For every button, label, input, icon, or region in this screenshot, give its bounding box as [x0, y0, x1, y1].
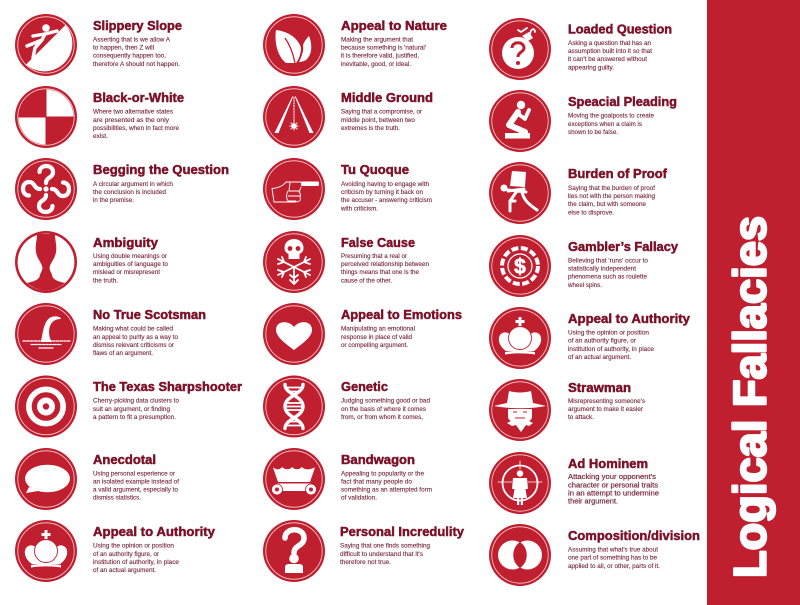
description: difficult to understand that it's	[340, 551, 424, 558]
item: Slippery Slope	[15, 14, 182, 76]
heading: Appeal to Nature	[341, 18, 447, 33]
description: mislead or misrepresent	[93, 269, 160, 276]
description: Saying that one finds something	[340, 543, 430, 550]
description: Manipulating an emotional	[341, 326, 416, 333]
item: Appeal to Authority (left column)	[15, 520, 216, 582]
heading: Appeal to Emotions	[341, 307, 462, 322]
description: it can't be answered without	[568, 56, 647, 63]
description: with criticism.	[340, 205, 378, 212]
description: Asserting that is we allow A	[93, 36, 171, 44]
description: consequently happen too,	[93, 53, 166, 60]
description: perceived relationship between	[341, 261, 429, 268]
description: because something is 'natural'	[341, 45, 426, 52]
item: Black-or-White	[15, 86, 184, 148]
description: something as an attempted form	[341, 486, 432, 493]
heading: Slippery Slope	[93, 18, 182, 33]
description	[93, 36, 180, 68]
description	[341, 470, 432, 502]
description: Using personal esperience or	[93, 470, 176, 477]
item: Appeal to Authority (right column)	[489, 307, 691, 369]
icon: four question marks	[15, 158, 77, 220]
description: Making the argument that	[341, 36, 413, 44]
heading: Black-or-White	[93, 90, 184, 105]
heading: Loaded Question	[568, 22, 672, 36]
description: in an attempt to undermine	[568, 490, 659, 497]
item: Tu Quoque	[263, 158, 432, 220]
description: response in place of valid	[341, 334, 412, 341]
heading: Bandwagon	[341, 452, 415, 467]
item: Personal Incredulity	[263, 520, 465, 582]
description: of an actual argument.	[568, 354, 631, 361]
description: the claim, but with someone	[568, 201, 646, 208]
description	[93, 543, 179, 574]
description: the conclusion is included	[93, 189, 166, 196]
icon: wagon	[263, 448, 325, 510]
description	[568, 185, 655, 216]
description: the truth.	[93, 277, 118, 284]
item: Anecdotal	[15, 448, 179, 510]
description: Moving the goalposts to create	[568, 113, 654, 120]
icon: person in crosshair	[489, 452, 551, 514]
heading: No True Scotsman	[93, 307, 206, 322]
item: Middle Ground	[263, 86, 433, 148]
description	[93, 109, 179, 140]
description	[568, 547, 660, 570]
description: from, or from whom it comes,	[341, 414, 423, 421]
description: criticism by turning it back on	[341, 189, 423, 196]
item: Loaded Question	[489, 18, 672, 80]
item: Speacial Pleading	[489, 90, 677, 152]
description: to happen, then Z will	[93, 45, 155, 52]
description: the accuser - answering criticism	[341, 197, 432, 204]
item: Ambiguity	[15, 231, 168, 293]
item: Begging the Question	[15, 158, 229, 220]
description: appearing guilty.	[568, 64, 614, 71]
description	[567, 258, 648, 289]
description: Asking a question that has an	[568, 40, 651, 47]
description: flaws of an argument.	[93, 350, 153, 357]
description: their argument.	[568, 499, 618, 506]
item: Gambler's Fallacy	[489, 235, 679, 297]
description	[341, 326, 416, 349]
description: fact that many people do	[341, 478, 412, 485]
description	[341, 253, 429, 284]
item: Genetic	[263, 376, 430, 438]
icon: speech bubble	[15, 448, 77, 510]
description: A circular argument in which	[93, 181, 173, 188]
icon: figure carrying box	[489, 162, 551, 224]
description: exceptions when a claim is	[568, 121, 643, 128]
heading: False Cause	[341, 235, 415, 250]
heading: Genetic	[341, 379, 388, 394]
item: Appeal to Emotions	[263, 303, 462, 365]
description: one part of something has to be	[568, 555, 657, 562]
description: Presuming that a real or	[341, 253, 408, 260]
description: ambiguities of language to	[93, 261, 168, 268]
description	[340, 543, 430, 566]
description: Using double meanings or	[93, 253, 168, 260]
description: a valid argument, especially to	[93, 486, 178, 493]
description: exist.	[93, 133, 108, 140]
description: of an authority figure, or	[93, 551, 160, 558]
description: an appeal to purity as a way to	[93, 334, 178, 341]
description	[93, 326, 178, 357]
panel: title sidebar	[707, 0, 800, 605]
description: Where two alternative states	[93, 109, 174, 116]
description: a pattern to fit a presumption.	[93, 414, 176, 421]
description	[341, 36, 426, 68]
description: of an authority figure, or	[568, 338, 637, 345]
description	[568, 474, 659, 506]
description: dismiss statistics.	[93, 495, 141, 502]
item: Ad Hominem	[489, 452, 659, 514]
title: Logical Fallacies	[724, 216, 776, 578]
heading: Middle Ground	[341, 90, 433, 105]
description: Believing that 'runs' occur to	[568, 258, 648, 264]
icon: casino chip	[489, 235, 551, 297]
description: statistically independent	[568, 266, 636, 273]
description	[568, 330, 654, 361]
description	[93, 470, 179, 502]
description: Cherry-picking data clusters to	[93, 398, 179, 405]
description	[93, 253, 168, 284]
heading: Speacial Pleading	[568, 94, 677, 109]
description: phenomena such as roulette	[568, 274, 647, 281]
icon: target	[15, 376, 77, 438]
description: it is therefore valid, justified,	[341, 53, 419, 60]
description: Avoiding having to engage with	[341, 181, 429, 188]
icon: heart	[263, 303, 325, 365]
description: assumption built into it so that	[568, 48, 652, 55]
description	[340, 181, 432, 212]
heading: Begging the Question	[93, 162, 229, 177]
description: institution of authority, in place	[568, 346, 654, 353]
heading: Burden of Proof	[568, 166, 668, 181]
heading: Appeal to Authority	[568, 311, 691, 326]
icon: quartered disc	[15, 86, 77, 148]
icon: crown	[489, 307, 551, 369]
heading: Ambiguity	[93, 235, 159, 250]
description: of validation.	[341, 495, 377, 502]
description: middle point, between two	[341, 117, 415, 124]
description	[341, 109, 423, 132]
description: Judging something good or bad	[341, 398, 430, 405]
description	[568, 40, 652, 71]
heading: Gambler’s Fallacy	[568, 239, 679, 254]
description: Attacking your opponent's	[568, 474, 657, 481]
heading: Tu Quoque	[341, 162, 409, 177]
item: False Cause	[263, 231, 429, 293]
icon: casino chip: $	[514, 256, 526, 278]
description: wheel spins.	[567, 282, 602, 289]
icon: vase and faces	[15, 231, 77, 293]
description: cause of the other.	[341, 277, 392, 284]
description: Making what could be called	[93, 326, 173, 333]
icon: question mark over person	[263, 520, 325, 582]
description: argument to make it easier	[568, 406, 644, 413]
description: institution of authority, in place	[93, 559, 179, 566]
heading: Anecdotal	[93, 452, 156, 467]
description	[568, 113, 654, 136]
description: in the premise.	[93, 197, 134, 204]
description: extremes is the truth.	[341, 125, 400, 132]
description: or compelling argument.	[341, 342, 408, 349]
description: on the basis of where it comes	[341, 406, 427, 413]
icon: road with middle point	[263, 86, 325, 148]
description: Using the opinion or position	[93, 543, 174, 550]
heading: Appeal to Authority	[93, 524, 216, 539]
item: Bandwagon	[263, 448, 432, 510]
description: shown to be false.	[568, 129, 618, 136]
item: Composition/division	[489, 524, 700, 586]
description: Appealing to popularity or the	[341, 470, 424, 477]
icon: DNA helix	[263, 376, 325, 438]
description: Misrepresenting someone's	[568, 398, 646, 405]
description: inevitable, good, or ideal.	[341, 61, 411, 68]
heading: Personal Incredulity	[340, 524, 465, 539]
item: Burden of Proof	[489, 162, 668, 224]
item: The Texas Sharpshooter	[15, 376, 242, 438]
icon: skull and snowflake	[263, 231, 325, 293]
description: therefore A should not happen.	[93, 61, 180, 68]
icon: overlapping circles	[489, 524, 551, 586]
description: character or personal traits	[568, 482, 659, 489]
item: No True Scotsman	[15, 303, 206, 365]
icon: crown	[15, 520, 77, 582]
icon: leaves	[263, 14, 325, 76]
description: an isolated example instead of	[93, 478, 179, 485]
item: Strawman	[489, 379, 646, 441]
description	[93, 181, 173, 204]
heading: Ad Hominem	[568, 456, 648, 471]
description	[568, 398, 646, 421]
description: to attack.	[568, 414, 594, 421]
description: Saying that a compromise, or	[341, 109, 423, 116]
icon: kneeling figure	[489, 90, 551, 152]
description: therefore not true.	[340, 559, 391, 566]
item: Appeal to Nature	[263, 14, 447, 76]
description: Using the opinion or position	[568, 330, 649, 337]
icon: pointing hand	[263, 158, 325, 220]
description: Saying that the burden of proof	[568, 185, 655, 192]
description: Assuming that what's true about	[568, 547, 658, 554]
description	[341, 398, 430, 421]
description	[93, 398, 179, 421]
icon: loch ness monster	[15, 303, 77, 365]
description: things means that one is the	[341, 269, 419, 276]
description: suit an argument, or finding	[93, 406, 170, 413]
heading: Composition/division	[568, 528, 700, 543]
heading: The Texas Sharpshooter	[93, 379, 242, 394]
icon: falling figure on slope	[15, 14, 77, 76]
description: else to disprove.	[568, 209, 614, 216]
description: dismiss relevant criticisms or	[93, 342, 175, 349]
description: are presented as the only	[93, 117, 170, 124]
description: possibilities, when in fact more	[93, 125, 179, 132]
heading: Strawman	[568, 380, 631, 395]
icon: scarecrow	[489, 379, 551, 441]
icon: question mark bomb	[489, 18, 551, 80]
description: lies not with the person making	[568, 193, 655, 200]
description: applied to all, or other, parts of it.	[568, 563, 660, 570]
description: of an actual argument.	[93, 567, 156, 574]
